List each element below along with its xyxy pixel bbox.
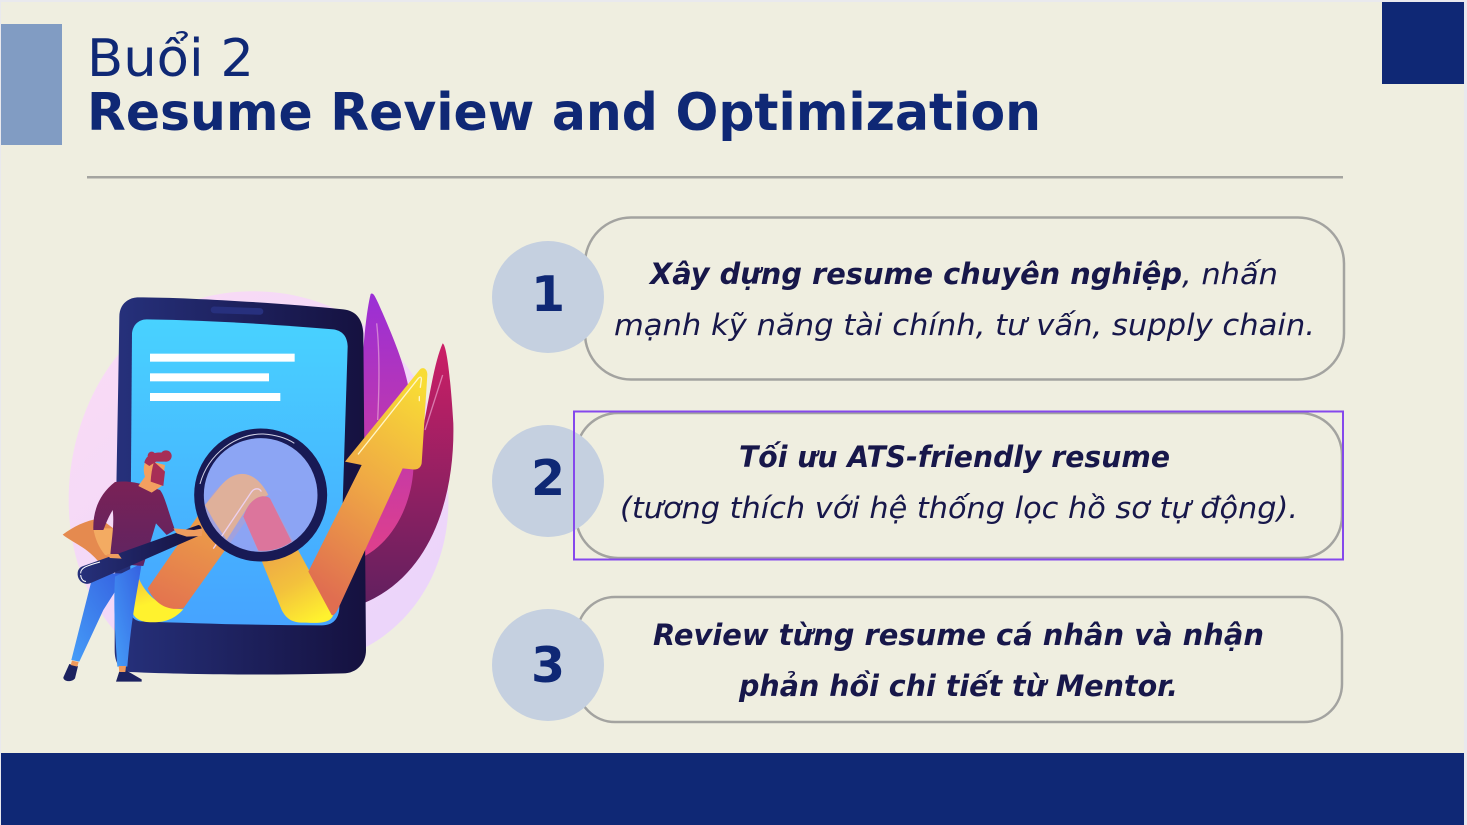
card 3 text — [653, 618, 1264, 703]
card 2 number: 2 — [531, 450, 565, 507]
arm back — [93, 528, 113, 557]
handle — [78, 525, 202, 584]
card 2 number badge — [492, 425, 604, 537]
shoes — [63, 664, 142, 682]
card 2 text: (tương thích với hệ thống lọc hồ sơ tự động). — [620, 491, 1298, 525]
accent block: top right — [1382, 2, 1464, 84]
front leg — [114, 563, 142, 667]
card 1 text: mạnh kỹ năng tài chính, tư vấn, supply chain. — [614, 308, 1315, 342]
tablet body — [115, 297, 366, 674]
card 1 — [492, 218, 1344, 380]
tablet screen — [130, 319, 348, 625]
card 3 number badge — [492, 609, 604, 721]
background blob — [69, 291, 448, 650]
card 2 text: Tối ưu ATS-friendly resume — [739, 440, 1170, 474]
beard — [151, 462, 165, 486]
illustration: magnifying glass over tablet chart — [63, 291, 453, 682]
neck and face — [138, 460, 165, 493]
card 3 — [492, 597, 1342, 722]
crimson leaf — [365, 343, 453, 603]
footer band — [1, 753, 1464, 825]
card 3 number: 3 — [531, 637, 565, 694]
back paper — [63, 518, 113, 563]
accent block: top left — [1, 24, 62, 145]
card 2 text — [620, 440, 1298, 525]
tablet speaker — [211, 306, 263, 315]
title: Resume Review and Optimization — [87, 83, 1041, 143]
person — [63, 450, 203, 682]
card 1 text: Xây dựng resume chuyên nghiệp — [648, 257, 1182, 291]
card 1 outline — [585, 218, 1344, 380]
rear leg — [71, 573, 127, 662]
torso — [93, 481, 175, 566]
chart arrow — [132, 368, 427, 623]
header divider — [87, 176, 1343, 178]
purple leaf — [360, 294, 416, 560]
card 3 text: phản hồi chi tiết từ Mentor. — [738, 669, 1178, 703]
card 1 text: , nhấn — [1182, 257, 1278, 291]
hands — [107, 528, 203, 559]
card 1 number: 1 — [531, 266, 565, 323]
card 2 outline — [576, 413, 1342, 558]
card 2 selection frame — [574, 412, 1343, 560]
card 3 outline — [577, 597, 1342, 722]
card 1 text — [614, 257, 1315, 342]
card 3 text: Review từng resume cá nhân và nhận — [653, 618, 1264, 652]
document lines — [150, 354, 295, 401]
leaf highlights — [377, 323, 443, 430]
title — [87, 29, 1041, 143]
title: Buổi 2 — [87, 29, 254, 89]
ankles — [71, 661, 126, 672]
hair — [144, 450, 172, 466]
magnifier lens — [199, 433, 322, 557]
card 1 number badge — [492, 241, 604, 353]
card 2 — [492, 412, 1343, 560]
